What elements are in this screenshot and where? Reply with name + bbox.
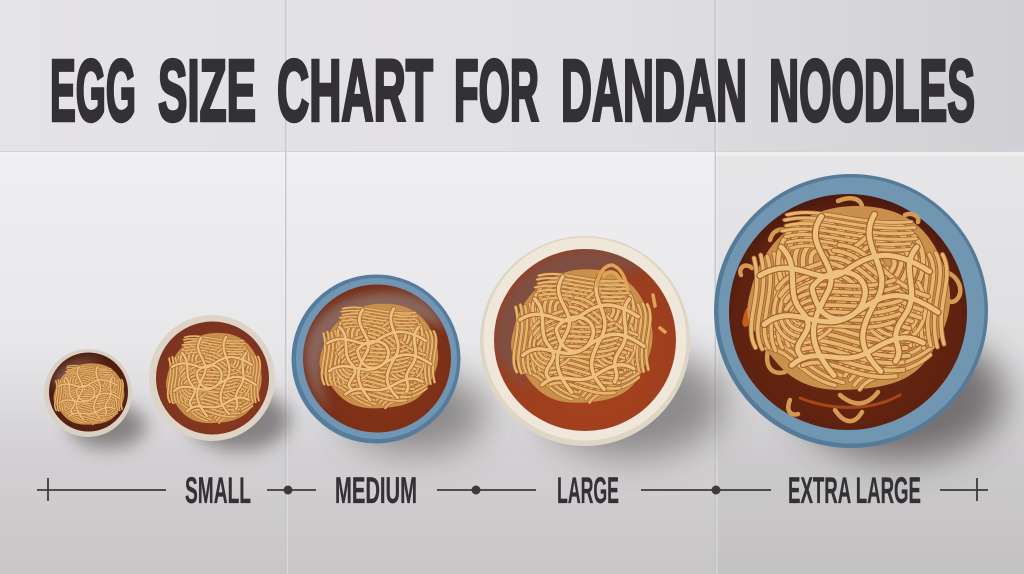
title: SIZE [158,42,256,140]
bowl: large blue rim [292,274,487,452]
loose noodles [597,265,665,332]
size scale axis [37,478,988,501]
bowl: extra large cream rim [480,236,724,456]
bowl: small [44,349,146,448]
title: CHART [277,42,433,140]
loose noodles in broth [740,198,960,421]
title: EGG [50,42,136,140]
bowl: extra large blue rim [714,174,1005,460]
label: medium: MEDIUM [335,470,417,511]
infographic canvas: LARGE [557,470,619,511]
label: small: SMALL [185,470,251,511]
title: DANDAN [561,42,747,140]
bowl: medium [149,315,290,450]
title [50,42,975,140]
title: FOR [454,42,539,140]
